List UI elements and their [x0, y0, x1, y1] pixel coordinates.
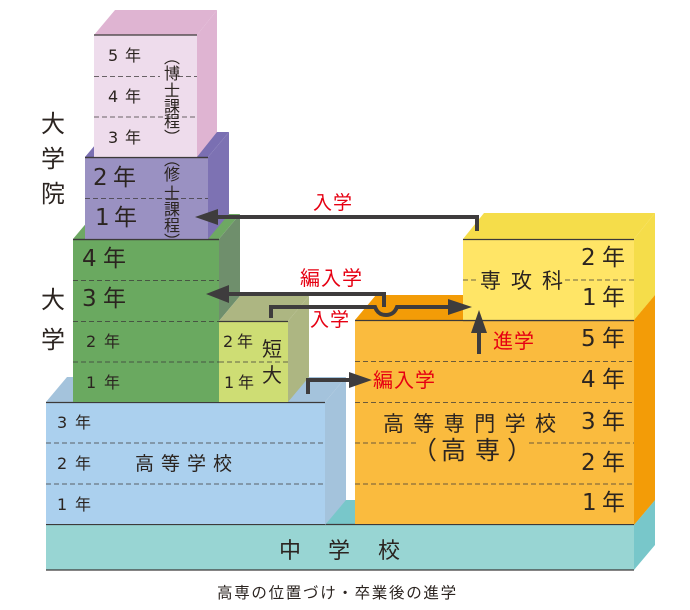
college of technology years [581, 326, 625, 516]
university years [82, 246, 126, 392]
label: master course: ︵ [164, 150, 180, 169]
block: college of technology [355, 295, 655, 525]
college of technology years: 3年 [581, 409, 625, 435]
label: college of technology: （高専） [412, 436, 532, 465]
block: high school [46, 377, 346, 525]
caption: 高専の位置づけ・卒業後の進学 [217, 584, 458, 602]
advanced course years [581, 245, 625, 311]
arrow: high school to college of technology [308, 372, 372, 394]
label: master course: 修 [164, 165, 180, 184]
advanced course years: 1年 [582, 285, 625, 311]
label: junior college [262, 337, 282, 387]
arrow: junior college to advanced course [271, 299, 472, 318]
label: university: 大 [41, 286, 65, 314]
doctoral years [108, 46, 141, 147]
label: university: 学 [41, 326, 65, 354]
label: master course: 士 [164, 184, 180, 203]
label: entry to master: 入学 [313, 192, 353, 214]
junior college years [223, 332, 254, 392]
college of technology years: 1年 [582, 490, 625, 516]
label: transfer to college of technology: 編入学 [373, 369, 436, 392]
high school years: 3年 [57, 413, 91, 432]
arrow: transfer to university year 3 [206, 285, 384, 307]
label: college of technology [383, 412, 565, 465]
high school years [57, 413, 91, 514]
label: master course: 程 [164, 216, 180, 235]
block: doctoral course [85, 10, 217, 158]
doctoral years: 5年 [108, 46, 141, 65]
label: doctoral course: 博 [164, 64, 180, 83]
label: high school: 高等学校 [135, 453, 239, 475]
label: progression: 進学 [493, 330, 535, 353]
block: advanced course [463, 213, 655, 320]
label: university [41, 286, 65, 354]
college of technology years: 2年 [581, 450, 625, 476]
block: university [73, 214, 240, 402]
label: junior high school: 中学校 [279, 539, 400, 564]
university years: 2年 [86, 332, 120, 351]
label: doctoral course: 課 [164, 97, 180, 116]
label: junior college: 大 [262, 363, 282, 387]
master years [93, 165, 137, 231]
high school years: 2年 [57, 454, 91, 473]
label: doctoral course: 士 [164, 81, 180, 100]
arrow: advanced course to master [195, 209, 477, 231]
label: doctoral course: ︶ [164, 128, 180, 147]
block: junior high school [46, 500, 655, 570]
label: graduate school: 学 [41, 145, 65, 173]
junior college years: 1年 [224, 373, 254, 392]
advanced course years: 2年 [581, 245, 625, 271]
label: graduate school: 大 [41, 110, 65, 138]
university years: 4年 [82, 246, 126, 272]
college of technology years: 4年 [581, 367, 625, 393]
junior college years: 2年 [223, 332, 253, 351]
label: doctoral course: 程 [164, 112, 180, 131]
doctoral years: 3年 [108, 128, 141, 147]
label: entry to advanced course: 入学 [310, 309, 350, 331]
label: advanced course: 専攻科 [480, 269, 573, 293]
label: graduate school: 院 [41, 180, 65, 208]
label: master course: ︶ [164, 232, 180, 251]
label: doctoral course [164, 48, 180, 147]
arrow: college of technology to advanced course [471, 310, 487, 354]
master years: 1年 [95, 205, 137, 231]
label: transfer to university: 編入学 [300, 267, 363, 290]
university years: 1年 [86, 373, 120, 392]
label: junior college: 短 [262, 337, 282, 361]
label: master course: 課 [164, 200, 180, 219]
block: junior college [219, 296, 309, 402]
label: college of technology: 高等専門学校 [383, 412, 565, 436]
college of technology years: 5年 [581, 326, 625, 352]
label: master course [164, 150, 180, 251]
label: graduate school [41, 110, 65, 208]
university years: 3年 [82, 286, 126, 312]
block: master course [73, 132, 229, 251]
high school years: 1年 [57, 495, 91, 514]
label: doctoral course: ︵ [164, 48, 180, 67]
doctoral years: 4年 [108, 87, 141, 106]
master years: 2年 [93, 165, 136, 191]
